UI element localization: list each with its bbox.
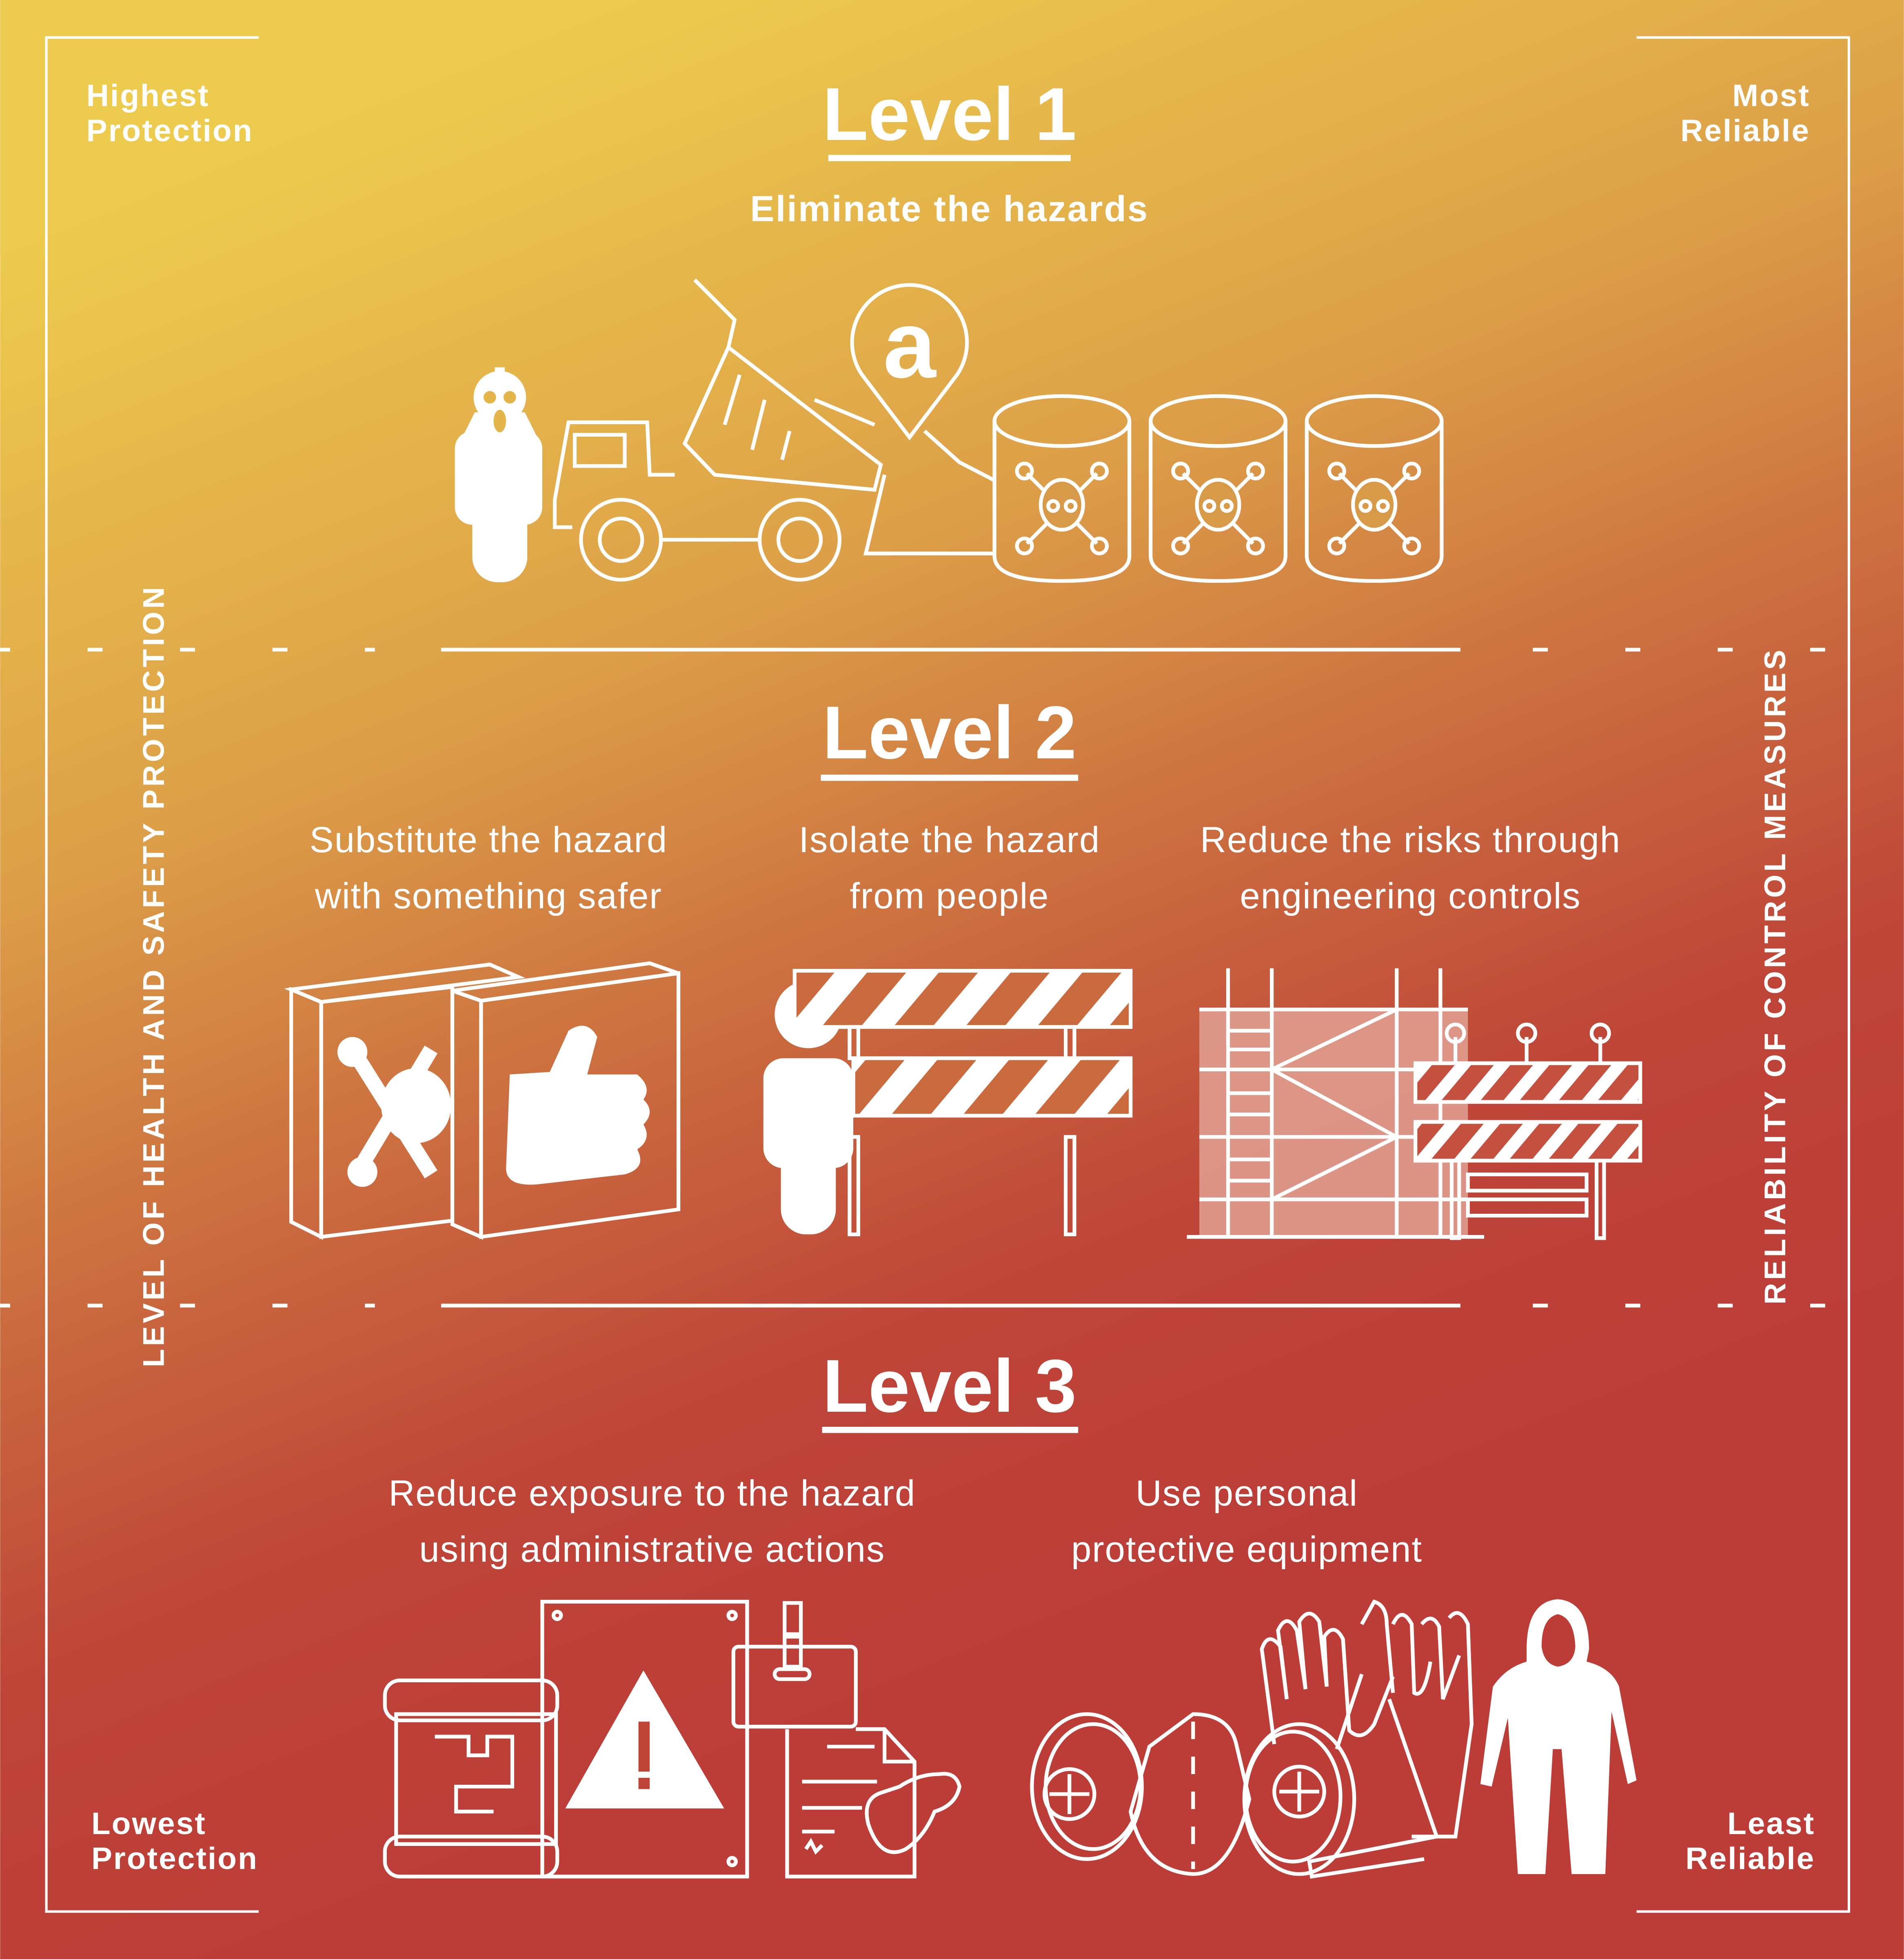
text: isolate: Isolate the hazard xyxy=(799,820,1100,860)
corner label: lowest protection xyxy=(91,1806,258,1876)
vertical axis label left: LEVEL OF HEALTH AND SAFETY PROTECTION xyxy=(136,584,170,1367)
icon: scaffolding and barrier xyxy=(1187,968,1640,1238)
corner label: highest protection xyxy=(87,78,253,148)
text: administrative: using administrative actions xyxy=(419,1529,885,1570)
icon: toxic barrels xyxy=(994,396,1442,581)
text: PPE: protective equipment xyxy=(1071,1529,1422,1570)
icon: gloves xyxy=(1262,1601,1471,1877)
icon: location pin: a xyxy=(883,291,936,398)
corner label: most reliable: Most xyxy=(1732,78,1810,113)
text: PPE xyxy=(1071,1473,1422,1570)
corner label: least reliable: Least xyxy=(1727,1806,1815,1841)
vertical axis label right: RELIABILITY OF CONTROL MEASURES xyxy=(1758,647,1792,1304)
text: administrative: Reduce exposure to the hazard xyxy=(388,1473,916,1513)
corner label: lowest protection: Lowest xyxy=(91,1806,206,1841)
text: substitute xyxy=(310,820,668,916)
corner label: highest protection: Highest xyxy=(87,78,210,113)
subtitle: eliminate: Eliminate the hazards xyxy=(750,189,1149,229)
text: PPE: Use personal xyxy=(1136,1473,1358,1513)
corner label: least reliable: Reliable xyxy=(1685,1841,1815,1876)
text: isolate: from people xyxy=(850,876,1049,916)
corner label: most reliable xyxy=(1680,78,1810,148)
corner label: lowest protection: Protection xyxy=(91,1841,258,1876)
icon: coverall xyxy=(1480,1599,1637,1874)
icon: scroll xyxy=(385,1680,557,1877)
title: Level 3: Level 3 xyxy=(822,1344,1076,1428)
icon: thumbs up xyxy=(506,1026,650,1185)
text: substitute: Substitute the hazard xyxy=(310,820,668,860)
text: engineering: engineering controls xyxy=(1240,876,1581,916)
corner label: most reliable: Reliable xyxy=(1680,113,1810,148)
icon: location pin xyxy=(852,285,967,437)
icon: badge xyxy=(733,1603,856,1727)
title: Level 1: Level 1 xyxy=(822,72,1076,156)
icon: person behind barrier xyxy=(763,971,1131,1234)
title: Level 2: Level 2 xyxy=(822,691,1076,774)
text: isolate xyxy=(799,820,1100,916)
text: engineering xyxy=(1200,820,1621,916)
icon: document xyxy=(787,1729,959,1877)
icon: administrative documents xyxy=(385,1601,959,1877)
icon: level 1 elimination scene xyxy=(455,280,1442,582)
corner label: highest protection: Protection xyxy=(87,113,253,148)
icon: warning board xyxy=(542,1601,747,1877)
text: substitute: with something safer xyxy=(315,876,662,916)
icon: respirator xyxy=(1032,1714,1354,1874)
corner label: least reliable xyxy=(1685,1806,1815,1876)
icon: person with gas mask xyxy=(455,367,542,582)
icon: substitution boxes xyxy=(291,963,679,1237)
text: administrative xyxy=(388,1473,916,1570)
text: engineering: Reduce the risks through xyxy=(1200,820,1621,860)
icon: dump truck xyxy=(555,280,996,580)
